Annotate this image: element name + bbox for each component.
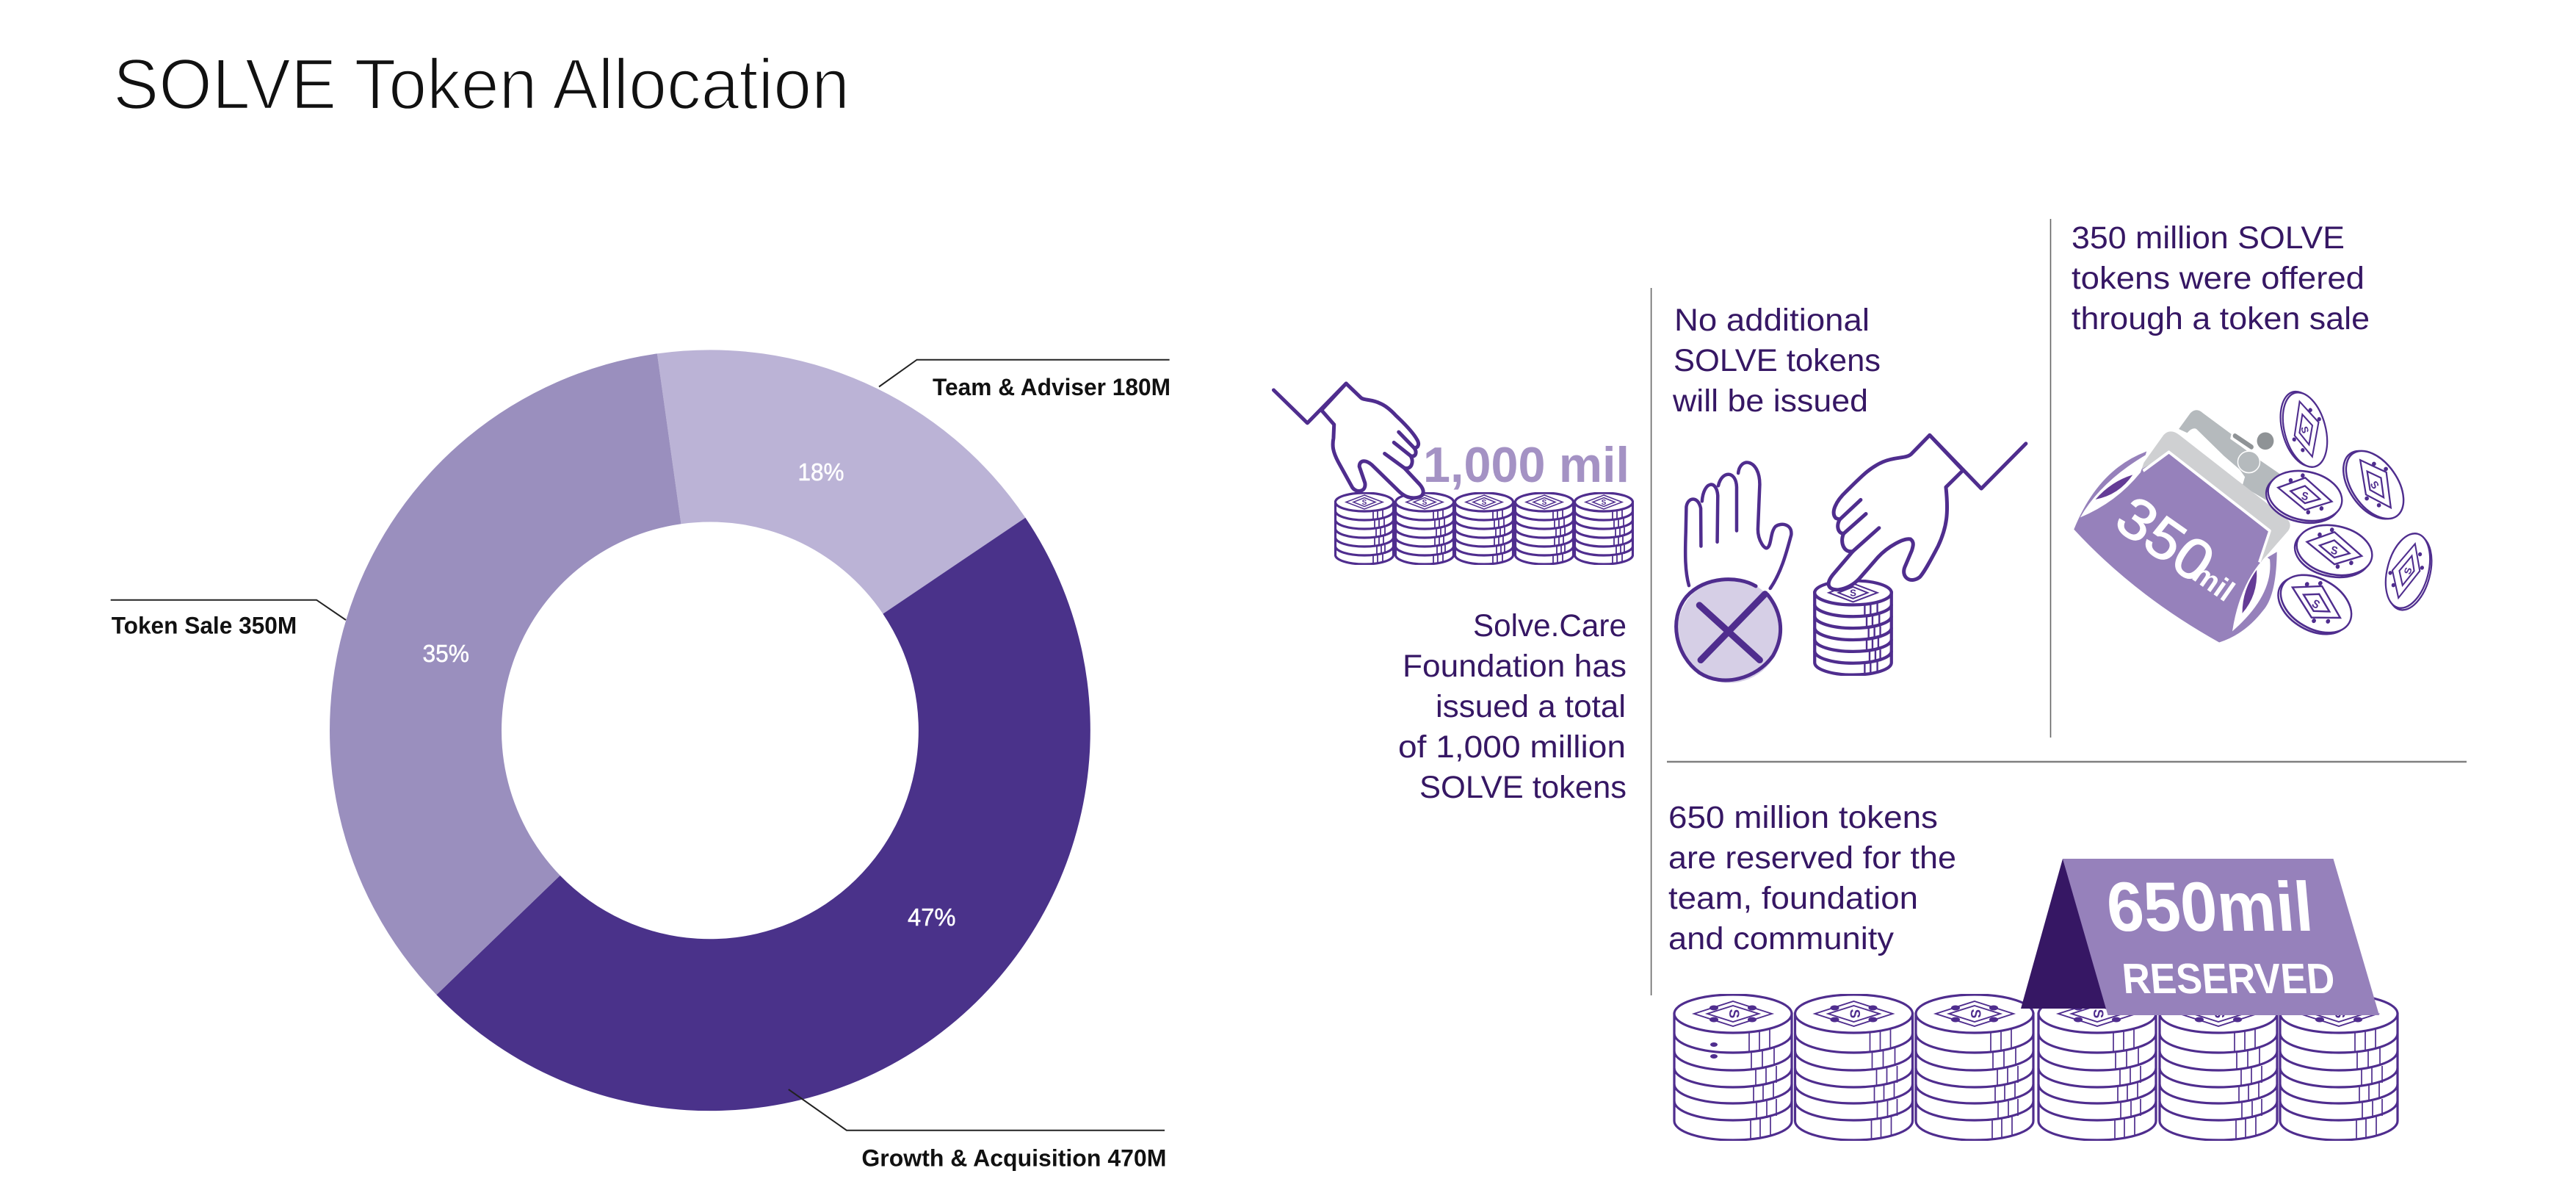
- tent sign: 650mil reserved: [2021, 859, 2379, 1015]
- callout: Token Sale: Token Sale 350M: [112, 613, 297, 639]
- text: total issued: [1398, 608, 1627, 805]
- text: total issued: Solve.Care: [1473, 608, 1627, 644]
- purse body: [2074, 452, 2277, 642]
- callout: Token Sale: [111, 600, 346, 639]
- text: 650 million reserved: 650 million tokens: [1668, 800, 1938, 835]
- percent label 47%: 47%: [908, 904, 956, 931]
- purse back frame: [2179, 410, 2284, 500]
- callout: Team & Adviser: [879, 360, 1171, 400]
- text: 650 million reserved: and community: [1668, 921, 1895, 956]
- sign value: 650mil: [2104, 868, 2316, 946]
- text: 350 million offered: through a token sale: [2072, 301, 2370, 336]
- sign caption: RESERVED: [2120, 955, 2337, 1003]
- text: 350 million offered: tokens were offered: [2072, 261, 2365, 296]
- callout: Growth & Acquisition: [789, 1089, 1166, 1172]
- text: no additional tokens: will be issued: [1672, 383, 1868, 419]
- donut chart: token allocation: [330, 350, 1090, 1111]
- text: total issued: issued a total: [1436, 689, 1626, 724]
- icon: six big coin stacks: [1674, 995, 2398, 1140]
- text: no additional tokens: SOLVE tokens: [1674, 343, 1881, 378]
- segment: Token Sale 35%: [330, 353, 681, 995]
- icon: hand pointing at coins: [1273, 383, 1423, 498]
- text: 650 million reserved: are reserved for the: [1668, 840, 1956, 876]
- text: 650 million reserved: team, foundation: [1668, 881, 1918, 916]
- title: SOLVE Token Allocation: [113, 44, 850, 124]
- text: total issued: of 1,000 million: [1398, 729, 1626, 765]
- icon: stop hand with X: [1676, 463, 1791, 683]
- callout: Growth & Acquisition: Growth & Acquisition 470M: [861, 1145, 1166, 1172]
- icon: falling coins: [2262, 386, 2439, 646]
- text: total issued: SOLVE tokens: [1419, 770, 1627, 805]
- segment: Growth & Acquisition 47%: [436, 518, 1090, 1111]
- big number: 1,000 mil: 1,000 mil: [1423, 437, 1629, 493]
- purse front frame: [2140, 431, 2290, 563]
- percent label 18%: 18%: [797, 458, 844, 486]
- purse label: 350: [2105, 483, 2226, 595]
- segment: Team & Adviser 18%: [657, 350, 1025, 614]
- percent label 35%: 35%: [423, 640, 469, 667]
- icon: five coin stacks: [1335, 493, 1633, 564]
- text: 350 million offered: 350 million SOLVE: [2072, 220, 2345, 256]
- icon: open purse: [2074, 410, 2290, 642]
- callout: Team & Adviser: Team & Adviser 180M: [933, 374, 1171, 400]
- icon: coin stack with pointing hand: [1815, 435, 2026, 675]
- text: no additional tokens: No additional: [1674, 303, 1870, 338]
- purse label: mil: [2187, 557, 2240, 608]
- text: total issued: Foundation has: [1403, 649, 1627, 684]
- text: 650 million reserved: [1668, 800, 1956, 956]
- text: 350 million offered: [2072, 220, 2370, 336]
- text: no additional tokens: [1672, 303, 1881, 419]
